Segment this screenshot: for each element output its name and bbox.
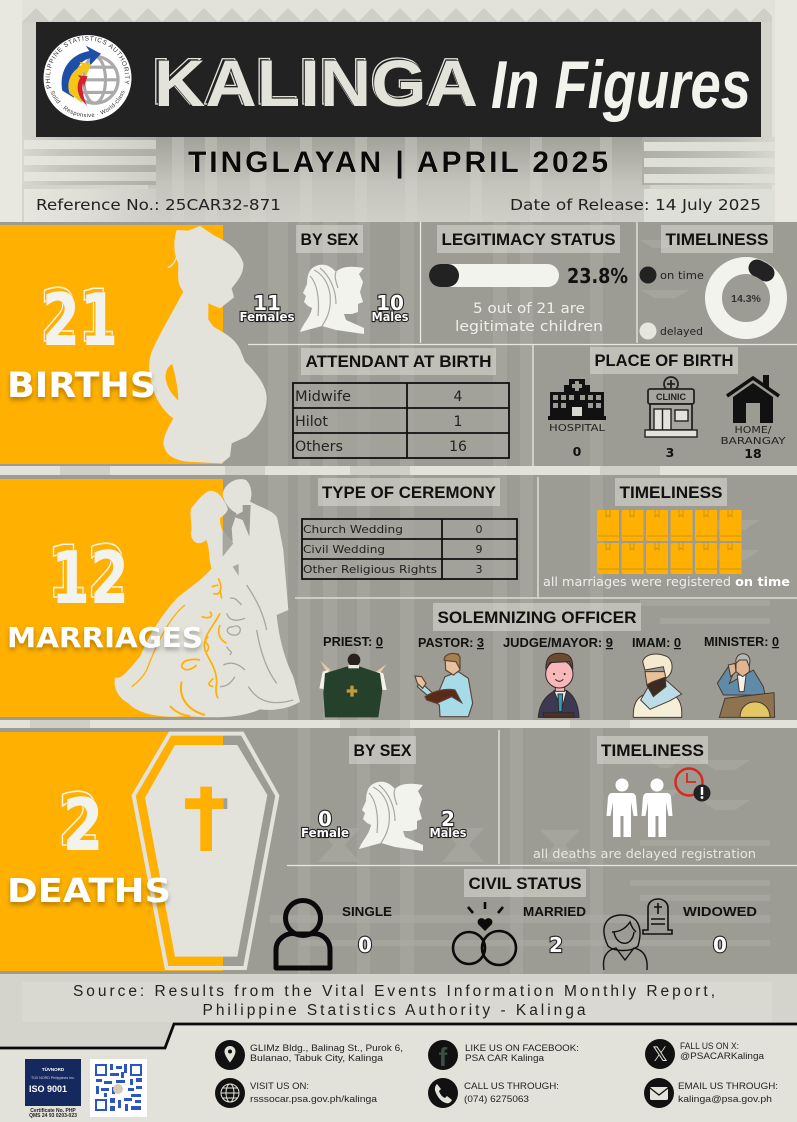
footer: [0, 1023, 797, 1122]
attendant table: Midwife: [295, 389, 351, 405]
attendant table: 16: [449, 439, 467, 455]
females count: [240, 291, 294, 324]
QR code: [90, 1059, 147, 1117]
attendant heading: ATTENDANT AT BIRTH: [306, 352, 492, 371]
male count: 2: [441, 807, 455, 831]
attendant table: Hilot: [295, 414, 329, 430]
officer: imam: [632, 636, 682, 717]
married value: [523, 905, 586, 957]
civil status heading: CIVIL STATUS: [468, 874, 582, 893]
marriages count: 12: [47, 530, 127, 614]
married value: 2: [549, 933, 563, 957]
by sex heading: BY SEX: [354, 741, 412, 760]
officer: pastor: PASTOR: 3: [418, 636, 484, 650]
contact: phone: [428, 1078, 559, 1108]
marriages label: MARRIAGES: [7, 621, 203, 654]
deaths label: DEATHS: [7, 871, 171, 910]
dividers: [295, 477, 797, 598]
contact: x: [645, 1039, 765, 1069]
title KALINGA: KALINGA: [151, 44, 477, 118]
ceremony table: 0: [476, 523, 482, 536]
ceremony table: Other Religious Rights: [303, 563, 437, 576]
PSA logo: Solid · Responsive · World-class: [50, 90, 124, 118]
contact: facebook: [428, 1040, 579, 1072]
single value: SINGLE: [342, 905, 392, 919]
source note: [73, 983, 715, 1019]
contact: x: FALL US ON X:: [680, 1041, 739, 1052]
home: [720, 375, 786, 461]
widowed value: WIDOWED: [683, 905, 757, 919]
females count: 11: [253, 291, 281, 315]
panel: deaths: [7, 730, 797, 970]
officer: minister: MINISTER: 0: [704, 635, 779, 649]
widowed value: [683, 905, 757, 957]
place heading: [590, 347, 738, 374]
orange section blocks: [0, 225, 223, 971]
timeliness heading: TIMELINESS: [666, 230, 768, 249]
deaths count: 2: [62, 783, 104, 867]
clinic: [645, 377, 697, 460]
female count: 0: [318, 807, 332, 831]
dividers: [248, 222, 797, 466]
timeliness donut: 14.3%: [731, 293, 762, 305]
bridal couple silhouette: [115, 479, 300, 717]
hospital: HOSPITAL: [549, 423, 606, 434]
panel backgrounds: [0, 222, 797, 974]
contact: website: VISIT US ON:: [250, 1081, 309, 1092]
subtitle: TINGLAYAN | APRIL 2025: [188, 146, 608, 179]
dividers: [287, 730, 797, 866]
officer: judge: [503, 636, 613, 717]
timeliness legend: [640, 266, 704, 340]
births count: 21: [42, 278, 118, 362]
home: HOME/: [734, 425, 772, 436]
widowed value: 0: [713, 933, 727, 957]
legitimacy note: 5 out of 21 are: [473, 301, 585, 317]
ceremony table: Church Wedding: [303, 523, 403, 536]
hospital: 0: [573, 444, 582, 459]
contact: facebook: PSA CAR Kalinga: [465, 1053, 545, 1064]
single value: 0: [358, 933, 372, 957]
ISO badge: [25, 1059, 81, 1119]
ceremony table: [302, 519, 517, 579]
contact: phone: CALL US THROUGH:: [464, 1081, 559, 1092]
contact: facebook: f: [439, 1042, 448, 1072]
clinic: 3: [666, 445, 674, 460]
legitimacy percent: 23.8%: [567, 264, 628, 288]
contact: address: GLIMz Bldg., Balinag St., Purok 6,: [250, 1043, 403, 1054]
officer: priest: PRIEST: 0: [323, 635, 383, 649]
title KALINGA: KALINGA: [154, 46, 478, 120]
timeliness heading: [661, 225, 773, 253]
contact: phone: (074) 6275063: [464, 1094, 529, 1105]
timeliness legend: on time: [660, 269, 704, 282]
death timeliness note: all deaths are delayed registration: [533, 846, 756, 861]
contact: x: @PSACARKalinga: [680, 1051, 765, 1062]
single value: [342, 905, 392, 957]
males count: Males: [372, 309, 408, 324]
place heading: PLACE OF BIRTH: [594, 351, 734, 370]
panel: births: [7, 222, 797, 466]
males count: 10: [376, 291, 404, 315]
hospital: [548, 379, 606, 459]
PSA logo: PHILIPPINE STATISTICS AUTHORITY: [46, 36, 130, 89]
legitimacy bar: [429, 264, 559, 287]
deaths count: 2: [58, 778, 100, 862]
attendant table: 4: [454, 389, 463, 405]
female count: [301, 807, 349, 840]
contact: website: [215, 1078, 378, 1108]
by sex heading: BY SEX: [300, 230, 359, 249]
ISO badge: Certificate No. PHP: [30, 1108, 76, 1114]
marriages count: 12: [51, 536, 129, 620]
clinic: CLINIC: [656, 392, 686, 402]
books pictogram: [597, 510, 742, 574]
ceremony table: 3: [476, 563, 482, 576]
release date: Date of Release: 14 July 2025: [510, 196, 761, 214]
officer heading: SOLEMNIZING OFFICER: [438, 608, 636, 627]
legitimacy note: [455, 301, 603, 335]
by sex heading: [296, 225, 363, 253]
home: BARANGAY: [720, 436, 786, 447]
delayed clock icon: [676, 768, 710, 802]
by sex: heads icon: [359, 782, 423, 851]
source note: Source: Results from the Vital Events Information Monthly Report,: [73, 983, 715, 1000]
coffin: [134, 734, 277, 968]
header banner: [36, 22, 761, 137]
attendant heading: [301, 348, 496, 375]
officer: priest: [319, 635, 387, 717]
death timeliness heading: [597, 736, 708, 764]
contact: address: [215, 1040, 403, 1070]
legitimacy note: legitimate children: [455, 319, 603, 335]
contact: facebook: LIKE US ON FACEBOOK:: [465, 1043, 579, 1054]
death timeliness heading: TIMELINESS: [601, 741, 704, 760]
married value: MARRIED: [523, 905, 586, 919]
ISO badge: ISO 9001: [29, 1084, 67, 1094]
marriage timeliness note: all marriages were registered on time: [543, 574, 790, 589]
marriage timeliness heading: TIMELINESS: [620, 483, 722, 502]
contact: email: EMAIL US THROUGH:: [678, 1081, 778, 1092]
ceremony heading: TYPE OF CEREMONY: [322, 483, 497, 502]
pregnant woman silhouette: [149, 226, 267, 463]
attendant table: 1: [454, 414, 462, 430]
births count: 21: [40, 274, 116, 358]
contact: email: kalinga@psa.gov.ph: [678, 1094, 772, 1105]
legitimacy heading: LEGITIMACY STATUS: [442, 230, 616, 249]
single icon: [276, 900, 330, 968]
officer heading: [433, 603, 641, 631]
by sex heading: [349, 736, 416, 764]
female count: Female: [301, 825, 349, 840]
males count: [372, 291, 408, 324]
ISO badge: TÜVNORD: [42, 1066, 65, 1072]
attendant table: Others: [295, 439, 343, 455]
reference number: Reference No.: 25CAR32-871: [36, 196, 281, 214]
contact: email: [644, 1078, 778, 1108]
marriage timeliness heading: [615, 478, 727, 506]
contact: address: Bulanao, Tabuk City, Kalinga: [250, 1053, 384, 1064]
officer: imam: IMAM: 0: [632, 636, 681, 650]
legitimacy heading: [437, 225, 620, 253]
births label: BIRTHS: [7, 366, 156, 406]
timeliness donut: [714, 266, 778, 330]
male count: [430, 807, 466, 840]
by sex: heads icon: [300, 265, 364, 334]
source note: Philippine Statistics Authority - Kalinga: [202, 1002, 586, 1019]
male count: Males: [430, 825, 466, 840]
contact: website: rsssocar.psa.gov.ph/kalinga: [250, 1094, 378, 1105]
people icon: [606, 778, 672, 837]
ceremony heading: [318, 478, 500, 506]
ISO badge: QMS 24 93 0203-023: [29, 1113, 77, 1119]
contact: x: 𝕏: [652, 1044, 668, 1066]
civil status heading: [464, 869, 586, 897]
attendant table: [293, 383, 509, 458]
ISO badge: TÜV NORD Philippines Inc.: [31, 1076, 75, 1080]
females count: Females: [240, 309, 294, 324]
ceremony table: 9: [476, 543, 482, 556]
ceremony table: Civil Wedding: [303, 543, 385, 556]
officer: judge: JUDGE/MAYOR: 9: [503, 636, 613, 650]
officer: pastor: [415, 636, 484, 717]
panel: marriages: [7, 477, 797, 717]
home: 18: [744, 446, 762, 461]
widow icon: [604, 899, 672, 970]
PSA logo: [44, 35, 132, 121]
officer: minister: [704, 635, 779, 717]
timeliness legend: delayed: [660, 325, 703, 338]
rings icon: [453, 902, 516, 965]
